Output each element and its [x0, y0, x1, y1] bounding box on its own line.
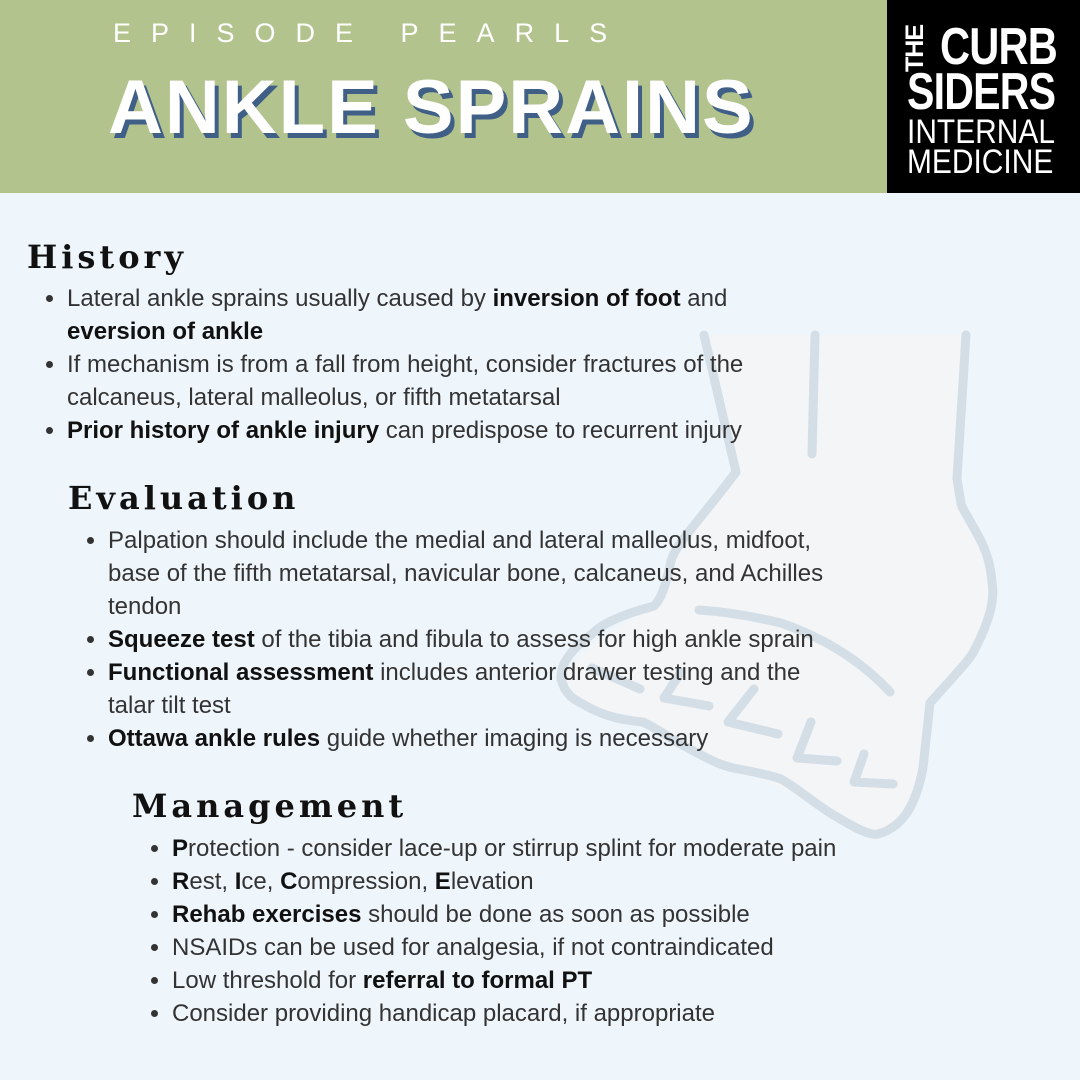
episode pearls label: EPISODE PEARLS [113, 18, 627, 48]
bullet list: history [46, 285, 743, 444]
bullet list: management: Protection - consider lace-up or stirrup splint for moderate pain [172, 835, 836, 862]
bullet list: management: Low threshold for referral to formal PT [172, 967, 592, 994]
header banner [0, 0, 887, 193]
heading: evaluation: Evaluation [68, 479, 299, 517]
bullet list: management: Consider providing handicap placard, if appropriate [172, 1000, 715, 1027]
bullet list: history: Prior history of ankle injury can predispose to recurrent injury [67, 417, 742, 444]
bullet list: evaluation [87, 527, 823, 752]
logo: CURB [940, 18, 1057, 76]
bullet list: evaluation: tendon [108, 593, 181, 620]
bullet list: evaluation: Squeeze test of the tibia and fibula to assess for high ankle sprain [108, 626, 814, 653]
bullet list: evaluation: talar tilt test [108, 692, 231, 719]
bullet list: history: Lateral ankle sprains usually caused by inversion of foot and [67, 285, 727, 312]
bullet list: management: NSAIDs can be used for analgesia, if not contraindicated [172, 934, 774, 961]
bullet list: management: Rehab exercises should be done as soon as possible [172, 901, 750, 928]
bullet list: evaluation: Functional assessment includes anterior drawer testing and the [108, 659, 800, 686]
section: evaluation [68, 479, 823, 752]
heading: history: History [27, 238, 187, 276]
section: management [132, 787, 836, 1027]
bullet list: evaluation: Palpation should include the medial and lateral malleolus, midfoot, [108, 527, 811, 554]
logo: THE [901, 25, 929, 72]
bullet list: evaluation: Ottawa ankle rules guide whether imaging is necessary [108, 725, 708, 752]
bullet list: history: eversion of ankle [67, 318, 263, 345]
title: ANKLE SPRAINS [108, 65, 755, 150]
bullet list: management: Rest, Ice, Compression, Elevation [172, 868, 534, 895]
logo: INTERNAL [907, 113, 1055, 151]
bullet list: history: If mechanism is from a fall from height, consider fractures of the [67, 351, 743, 378]
logo [887, 0, 1080, 193]
bullet list: management [151, 835, 836, 1027]
section: history [27, 238, 743, 444]
logo: MEDICINE [907, 143, 1053, 181]
logo: SIDERS [907, 63, 1055, 121]
heading: management: Management [132, 787, 407, 825]
bullet list: evaluation: base of the fifth metatarsal, navicular bone, calcaneus, and Achilles [108, 560, 823, 587]
bullet list: history: calcaneus, lateral malleolus, or fifth metatarsal [67, 384, 561, 411]
